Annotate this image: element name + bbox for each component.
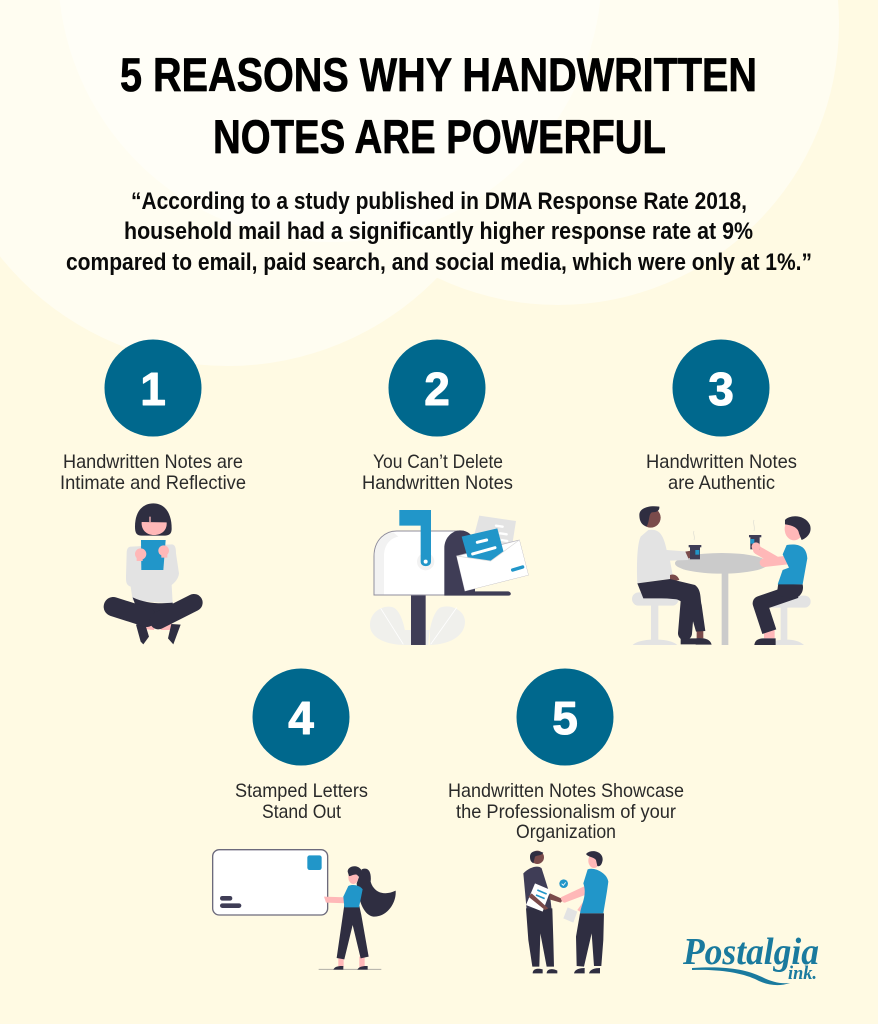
number badge 3 xyxy=(672,340,770,436)
title: NOTES ARE POWERFUL xyxy=(213,110,666,163)
left man xyxy=(637,530,688,583)
quote text block xyxy=(66,188,812,276)
panel: reason 5 xyxy=(448,668,684,973)
heading: reason 5 xyxy=(448,780,684,843)
number badge 2 xyxy=(388,340,486,436)
heading: reason 5: Organization xyxy=(516,821,616,843)
heading: reason 3 xyxy=(646,451,797,494)
heading: reason 3: are Authentic xyxy=(668,472,775,494)
number badge 1 xyxy=(104,340,202,436)
heading: reason 5: the Professionalism of your xyxy=(456,801,676,823)
number badge 1: 1 xyxy=(140,363,166,415)
number badge 4: 4 xyxy=(288,692,314,744)
icon: woman reading xyxy=(113,503,194,644)
number badge 4 xyxy=(252,668,350,766)
logo: Postalgia ink: ink. xyxy=(788,963,817,984)
heading: reason 2 xyxy=(362,451,513,494)
quote text block: household mail had a significantly higher response rate at 9% xyxy=(124,218,753,245)
heading: reason 4: Stand Out xyxy=(262,801,342,823)
heading: reason 1: Intimate and Reflective xyxy=(60,472,246,494)
title: 5 REASONS WHY HANDWRITTEN xyxy=(120,48,757,101)
number badge 2: 2 xyxy=(424,363,450,415)
heading: reason 1: Handwritten Notes are xyxy=(63,451,243,473)
heading: reason 5: Handwritten Notes Showcase xyxy=(448,780,684,802)
icon: woman beside a large postcard xyxy=(213,850,396,970)
icon: two people shaking hands xyxy=(523,851,608,973)
panel: reason 4 xyxy=(213,668,396,970)
number badge 5 xyxy=(516,668,614,766)
icon: mailbox with letters xyxy=(370,510,528,645)
title xyxy=(120,48,757,163)
panel: reason 3 xyxy=(632,340,811,645)
icon: two people at a table xyxy=(632,506,811,645)
logo: Postalgia ink: Postalgia xyxy=(682,931,819,973)
quote text block: “According to a study published in DMA Response Rate 2018, xyxy=(131,188,747,215)
heading: reason 4: Stamped Letters xyxy=(235,780,368,802)
heading: reason 1 xyxy=(60,451,246,494)
heading: reason 2: You Can’t Delete xyxy=(373,451,503,473)
right man xyxy=(764,630,775,638)
heading: reason 4 xyxy=(235,780,368,823)
heading: reason 3: Handwritten Notes xyxy=(646,451,797,473)
number badge 5: 5 xyxy=(552,692,578,744)
panel: reason 1 xyxy=(60,340,246,644)
panel: reason 2 xyxy=(362,340,528,645)
heading: reason 2: Handwritten Notes xyxy=(362,472,513,494)
number badge 3: 3 xyxy=(708,363,734,415)
